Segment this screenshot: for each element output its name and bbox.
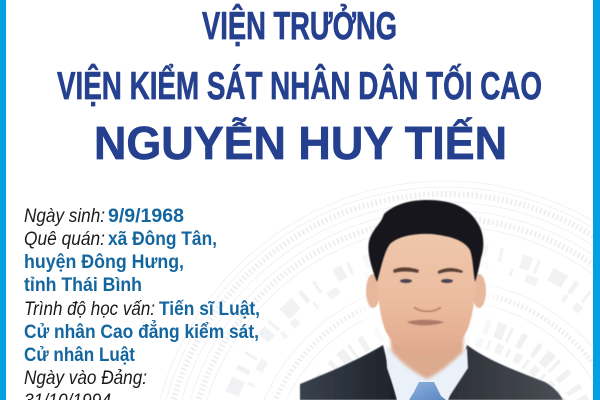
necktie (409, 382, 446, 400)
mouth (407, 320, 444, 325)
nose shadow (414, 307, 441, 312)
biography text block: xã Đông Tân, (108, 229, 217, 250)
title name: NGUYỄN HUY TIẾN (94, 117, 507, 169)
hair (368, 200, 483, 282)
eyes (400, 279, 453, 283)
face (376, 229, 477, 356)
title line 1: VIỆN TRƯỞNG (202, 4, 397, 48)
right border bar (593, 0, 600, 400)
portrait photo (300, 200, 563, 400)
biography text block: Ngày vào Đảng: (24, 368, 147, 389)
biography text block: Cử nhân Cao đẳng kiểm sát, (24, 321, 259, 343)
shirt collar (386, 345, 468, 400)
suit jacket right (448, 345, 563, 400)
biography text block: huyện Đông Hưng, (24, 252, 184, 273)
suit jacket left (300, 345, 397, 400)
eyebrows (393, 267, 463, 274)
biography text block: Tiến sĩ Luật, (159, 299, 260, 320)
right ear (472, 274, 486, 308)
biography text block: Cử nhân Luật (24, 345, 136, 366)
biography text block: Trình độ học vấn: (24, 299, 155, 320)
left ear (366, 274, 380, 308)
biography text block: 9/9/1968 (108, 206, 184, 227)
biography text block: Quê quán: (24, 229, 105, 250)
neck (390, 325, 464, 379)
biography text block (24, 206, 260, 400)
biography text block: Ngày sinh: (24, 206, 105, 227)
biography text block: tỉnh Thái Bình (24, 275, 142, 296)
background drum seal pattern (150, 181, 600, 400)
left border bar (0, 0, 6, 400)
